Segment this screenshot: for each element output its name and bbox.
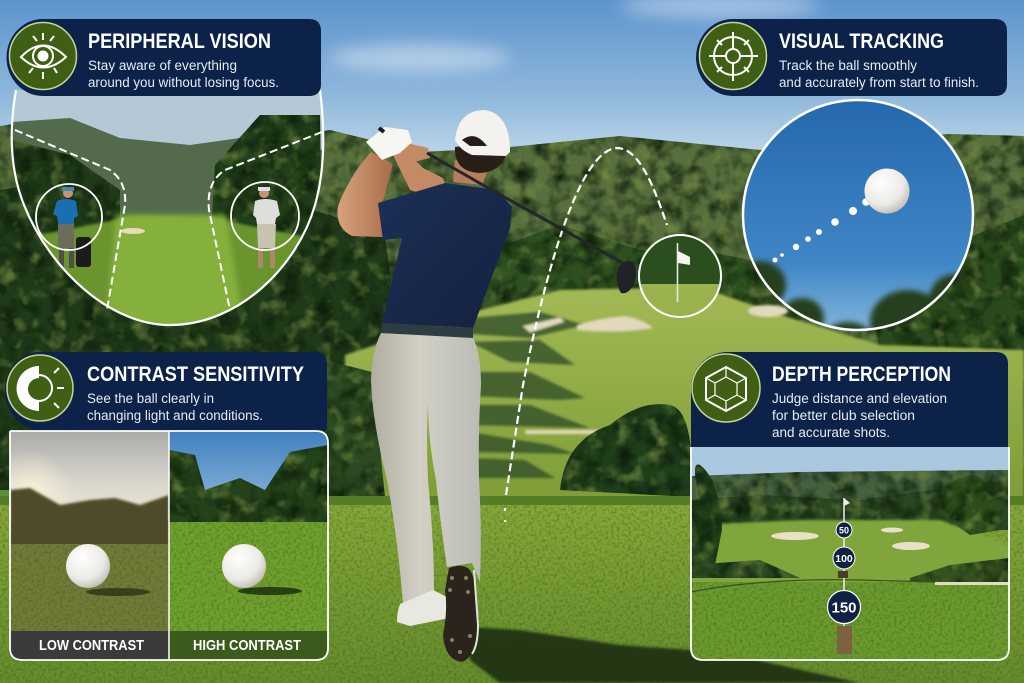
flag and distance line: [837, 498, 852, 654]
distance marker 150: 150: [831, 600, 857, 616]
description visual tracking: Track the ball smoothly: [779, 58, 917, 73]
left tree mass: [0, 180, 400, 490]
header peripheral vision: [7, 19, 321, 96]
icon: 3D cube: [692, 354, 760, 422]
lens outline: [12, 90, 323, 325]
description contrast sensitivity: [87, 391, 263, 423]
raised tee edge: [0, 496, 1024, 506]
contrast comparison images: [0, 431, 328, 660]
neck: [453, 160, 490, 185]
focus rings: [36, 182, 299, 250]
depth scene image: [691, 447, 1009, 662]
title peripheral vision: PERIPHERAL VISION: [88, 30, 271, 53]
panel: visual tracking: [696, 19, 1007, 354]
description depth perception: and accurate shots.: [772, 425, 890, 440]
distance marker 100: [833, 547, 855, 569]
center bush: [560, 404, 692, 497]
ball trail: [772, 198, 870, 262]
description visual tracking: [779, 58, 979, 90]
header depth perception: [691, 352, 1008, 447]
panel: peripheral vision: [7, 19, 328, 330]
description visual tracking: and accurately from start to finish.: [779, 75, 979, 90]
title depth perception: DEPTH PERCEPTION: [772, 363, 951, 386]
golf club: [379, 128, 636, 293]
raised shoe sole: [443, 566, 478, 662]
low contrast label bar: [10, 631, 169, 660]
ball flight trajectory: [505, 148, 667, 522]
high contrast label: HIGH CONTRAST: [193, 638, 301, 654]
distant wooded hills: [0, 118, 1024, 360]
description depth perception: Judge distance and elevation: [772, 391, 947, 406]
panel: depth perception: [691, 352, 1009, 662]
cap opening: [462, 136, 487, 146]
description peripheral vision: Stay aware of everything: [88, 58, 237, 73]
white cap: [455, 110, 510, 156]
white glove: [366, 127, 412, 160]
sand bunkers: [522, 305, 788, 434]
description depth perception: for better club selection: [772, 408, 915, 423]
description peripheral vision: [88, 58, 279, 90]
description contrast sensitivity: changing light and conditions.: [87, 408, 263, 423]
distance marker 50: [836, 522, 852, 538]
high contrast scene: [169, 431, 328, 632]
low contrast label: LOW CONTRAST: [39, 638, 144, 654]
header visual tracking: [696, 19, 1007, 96]
tree shadows on fairway: [470, 312, 590, 478]
title visual tracking: VISUAL TRACKING: [779, 30, 944, 53]
tee grass: [0, 505, 1024, 683]
distance marker 50: 50: [839, 526, 849, 536]
navy polo shirt: [378, 183, 512, 328]
flag landscape: [640, 236, 720, 294]
fairway: [345, 287, 1024, 510]
lower left shrubs: [325, 360, 385, 497]
hand: [394, 140, 430, 163]
right tree mass: [870, 215, 1024, 520]
icon: crosshair: [700, 22, 766, 90]
distance marker 150: [828, 590, 860, 624]
belt: [381, 323, 473, 338]
left golfer in blue: [53, 187, 91, 268]
left shoe: [397, 590, 449, 626]
clouds: [330, 0, 820, 72]
low contrast scene: [0, 431, 169, 632]
icon: eye: [10, 22, 76, 90]
flying golf ball: [864, 168, 910, 214]
distance marker 100: 100: [835, 553, 853, 565]
header contrast sensitivity: [5, 352, 327, 430]
vision cone dashed lines: [15, 130, 322, 310]
title contrast sensitivity: CONTRAST SENSITIVITY: [87, 363, 304, 386]
description depth perception: [772, 391, 947, 440]
panel: contrast sensitivity: [0, 352, 328, 660]
golfer shadow: [470, 627, 860, 683]
peripheral scene lens: [8, 90, 328, 330]
flag: [676, 243, 678, 302]
near arm: [338, 152, 393, 237]
far arm: [393, 155, 446, 192]
tracking lens: [742, 98, 974, 332]
sky: [0, 0, 1024, 175]
description peripheral vision: around you without losing focus.: [88, 75, 279, 90]
hair: [455, 145, 506, 173]
right golfer in white: [253, 187, 280, 268]
tree line behind fairway: [480, 225, 850, 320]
icon: half sun: [7, 355, 73, 421]
high contrast label bar: [169, 631, 328, 660]
front trouser leg: [371, 333, 481, 604]
description contrast sensitivity: See the ball clearly in: [87, 391, 214, 406]
target flag circle: [638, 234, 722, 318]
golfer: [338, 110, 636, 662]
